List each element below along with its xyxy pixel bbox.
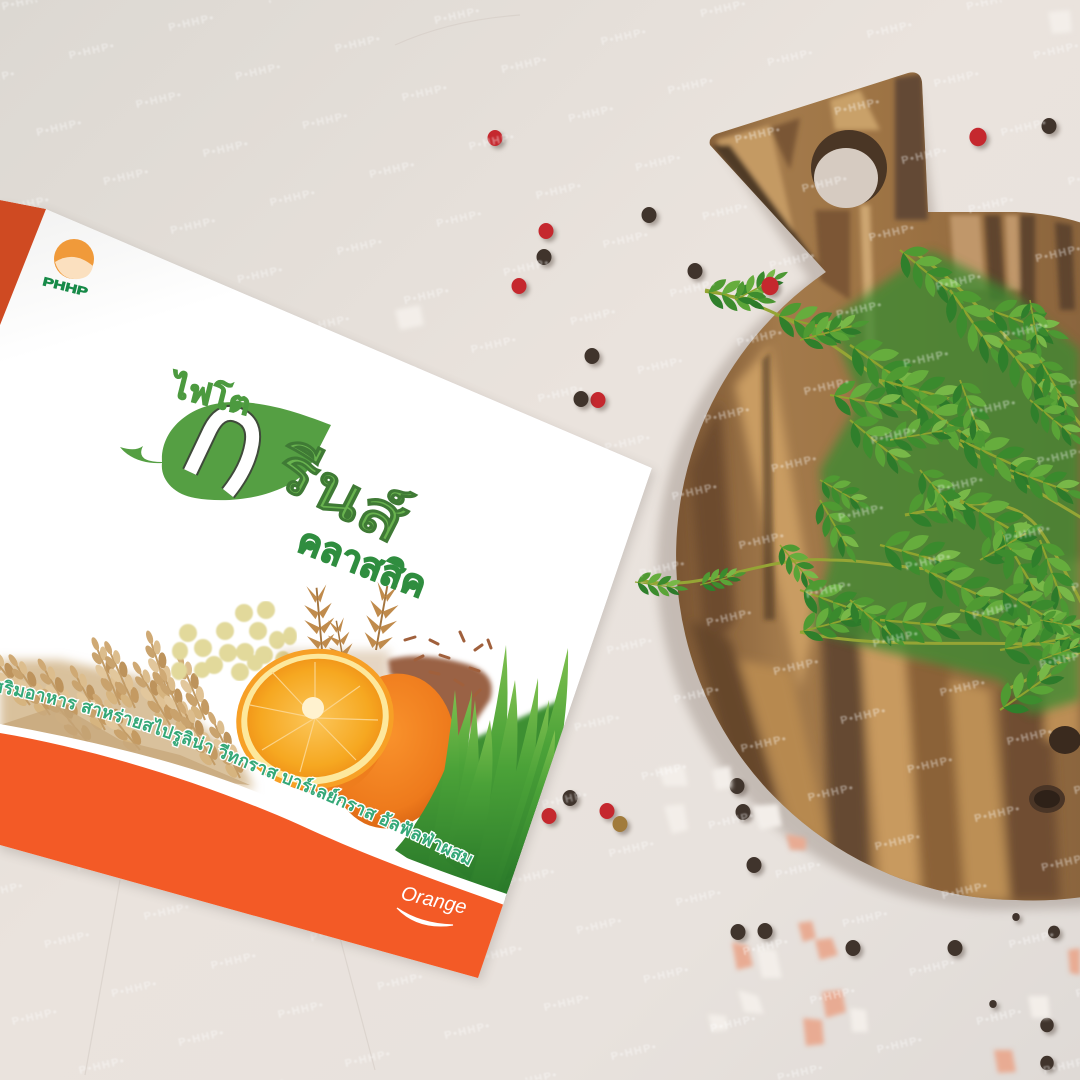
logo: PHHP sun: PHHP xyxy=(41,274,89,299)
whole orange xyxy=(338,674,452,828)
logo: phyto greens leaf xyxy=(120,367,432,606)
oats xyxy=(276,582,398,677)
red corner flap xyxy=(0,200,46,325)
orange half xyxy=(236,648,394,794)
white curved band xyxy=(0,724,510,990)
handle hole xyxy=(811,130,887,208)
salt crystals: pink and white xyxy=(395,10,1080,1073)
wheatgrass xyxy=(395,645,582,900)
peppercorns: black xyxy=(536,118,1060,1070)
board knots xyxy=(1029,726,1080,813)
product box xyxy=(0,200,656,983)
thyme herb sprigs xyxy=(633,236,1080,724)
leaf body xyxy=(120,402,331,500)
logo: phyto greens leaf: ไฟโต xyxy=(165,367,255,422)
peppercorns: red xyxy=(488,128,987,824)
logo: PHHP sun xyxy=(41,239,94,299)
wood grain: handle xyxy=(712,74,928,420)
white letter xyxy=(190,413,253,493)
orange curved band xyxy=(0,733,507,985)
logo: phyto greens leaf: คลาสสิค xyxy=(292,519,432,606)
cutting board xyxy=(657,72,1080,910)
box white front xyxy=(0,200,652,978)
red rice xyxy=(388,632,492,745)
orange flavour label: Orange xyxy=(399,882,469,919)
logo: phyto greens leaf: รีนส์ xyxy=(261,431,419,557)
wood grain: round board streaks xyxy=(690,345,1080,900)
soybeans xyxy=(171,601,297,681)
wheat ears xyxy=(0,627,255,790)
herb mass underlay xyxy=(810,250,1080,715)
